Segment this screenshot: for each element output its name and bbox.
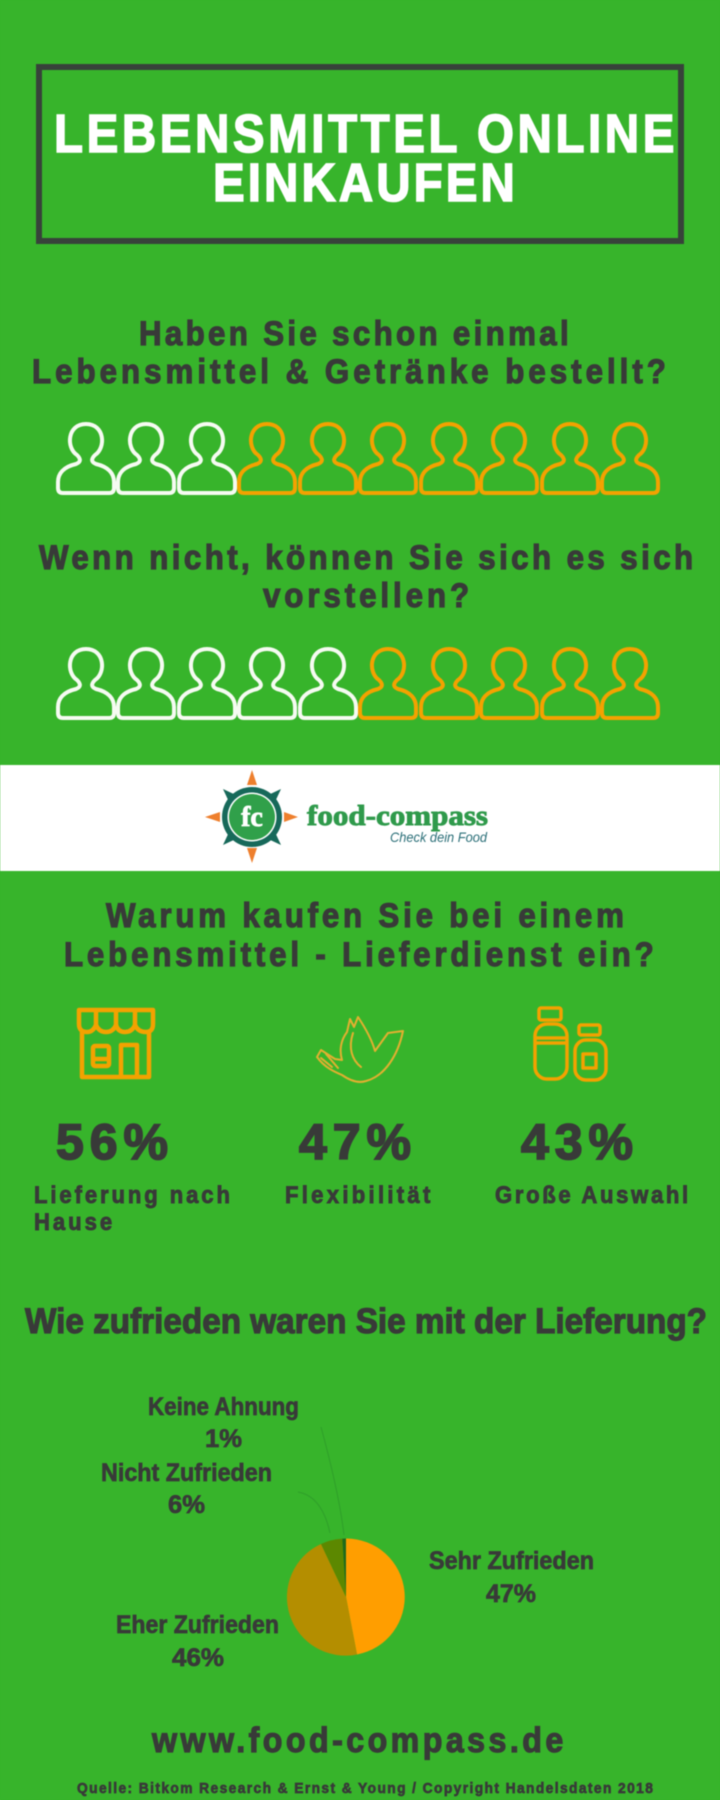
title text: LEBENSMITTEL ONLINE	[54, 103, 674, 164]
heading: question 2	[39, 538, 693, 614]
icon: shop	[79, 1010, 153, 1077]
pie label: Keine Ahnung: 1%	[205, 1425, 242, 1453]
leader lines	[298, 1427, 344, 1535]
logo wordmark	[307, 801, 488, 845]
pie label: Nicht Zufrieden: 6%	[168, 1491, 205, 1519]
title text	[54, 103, 674, 213]
pie label: Keine Ahnung	[148, 1393, 299, 1453]
heading: question 2: vorstellen?	[263, 576, 469, 614]
pie label: Keine Ahnung: Keine Ahnung	[148, 1393, 299, 1421]
stat: 43%	[495, 1114, 688, 1208]
icon: bottles	[535, 1008, 606, 1080]
stat: 43%: 43%	[521, 1114, 633, 1170]
heading: question 2: Wenn nicht, können Sie sich es sich	[39, 538, 693, 576]
stat label: Lieferung nach	[34, 1181, 230, 1208]
icon: compass logo: fc	[241, 802, 263, 833]
heading: question 3: Warum kaufen Sie bei einem	[106, 896, 624, 934]
stat label	[34, 1181, 230, 1235]
stat: 43%: Große Auswahl	[495, 1181, 688, 1208]
title text: EINKAUFEN	[213, 152, 515, 213]
icon: compass logo	[205, 770, 298, 863]
pie label: Eher Zufrieden: 46%	[172, 1644, 224, 1672]
pictogram row 2: 5 of 10 people	[58, 649, 658, 718]
pie chart	[287, 1427, 405, 1656]
heading: question 3: Lebensmittel - Lieferdienst ein?	[64, 935, 654, 973]
pie label: Sehr Zufrieden: Sehr Zufrieden	[429, 1547, 594, 1575]
logo wordmark: Check dein Food	[390, 829, 488, 845]
stat: 56%	[34, 1114, 230, 1235]
stat label: Hause	[34, 1208, 112, 1235]
stat: 47%	[285, 1114, 431, 1208]
logo wordmark: food-compass	[307, 801, 488, 832]
white logo band	[0, 765, 720, 871]
heading: question 3	[64, 896, 654, 973]
pie label: Sehr Zufrieden	[429, 1547, 594, 1608]
heading: question 1: Lebensmittel & Getränke bestellt?	[32, 352, 666, 390]
title box	[39, 67, 681, 241]
pie label: Nicht Zufrieden	[101, 1459, 272, 1519]
pie label: Eher Zufrieden	[116, 1611, 279, 1672]
icon: dove hand	[317, 1017, 403, 1082]
stat: 47%: 47%	[299, 1114, 411, 1170]
website url: www.food-compass.de	[151, 1722, 563, 1760]
stat: 47%: Flexibilität	[285, 1181, 431, 1208]
pie label: Eher Zufrieden: Eher Zufrieden	[116, 1611, 279, 1639]
source line: Quelle: Bitkom Research & Ernst & Young / Copyright Handelsdaten 2018	[77, 1781, 653, 1797]
heading: question 1	[32, 314, 666, 390]
pie label: Nicht Zufrieden: Nicht Zufrieden	[101, 1459, 272, 1487]
stat: 56%: 56%	[56, 1114, 168, 1170]
heading: question 1: Haben Sie schon einmal	[139, 314, 569, 352]
pictogram row 1: 3 of 10 people	[58, 424, 658, 493]
pie label: Sehr Zufrieden: 47%	[486, 1580, 536, 1608]
